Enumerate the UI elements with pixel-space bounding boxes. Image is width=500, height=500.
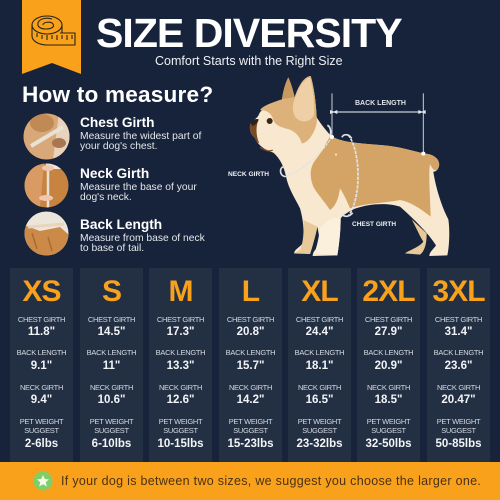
size column: XS: 9.1" — [31, 360, 52, 372]
photo: back length — [24, 212, 68, 256]
measurement: neck girth loop — [281, 125, 332, 177]
size column: 2XL: 27.9" — [375, 326, 402, 338]
size column: M: 12.6" — [167, 394, 194, 406]
size column: L: CHEST GIRTH — [227, 315, 274, 324]
size column: XL: 23-32lbs — [296, 438, 343, 450]
dog illustration — [250, 76, 449, 256]
size column: M: NECK GIRTH — [159, 383, 202, 392]
size column: 3XL: 50-85lbs — [435, 438, 482, 450]
size column: XS: CHEST GIRTH — [18, 315, 65, 324]
size column: L: 15-23lbs — [227, 438, 274, 450]
size column: XS: 2-6lbs — [25, 438, 58, 450]
size column: S: BACK LENGTH — [87, 348, 136, 357]
size column: 3XL: 3XL — [432, 275, 485, 308]
text: neck girth: dog's neck. — [80, 192, 132, 203]
size column: L: NECK GIRTH — [229, 383, 272, 392]
size column: XS: NECK GIRTH — [20, 383, 63, 392]
size column: M: M — [168, 275, 193, 308]
icon: green star badge — [34, 472, 52, 490]
size column: 2XL: PET WEIGHT — [367, 417, 410, 426]
size column: XS: 11.8" — [28, 326, 55, 338]
size column: 2XL: CHEST GIRTH — [365, 315, 412, 324]
size column: XS: XS — [22, 275, 61, 308]
size column: 3XL: NECK GIRTH — [437, 383, 480, 392]
size column: XL: XL — [301, 275, 338, 308]
dog diagram — [250, 76, 450, 256]
size column: XS: 9.4" — [31, 394, 52, 406]
label: neck girth: NECK GIRTH — [228, 171, 269, 178]
size column: M: 13.3" — [167, 360, 194, 372]
size column: 3XL: BACK LENGTH — [434, 348, 483, 357]
size column: S — [80, 268, 143, 462]
size column: 2XL: SUGGEST — [371, 426, 406, 435]
size column: 2XL: BACK LENGTH — [364, 348, 413, 357]
measurement: chest girth loop — [342, 135, 358, 216]
size column: M: CHEST GIRTH — [157, 315, 204, 324]
text: chest girth — [80, 115, 202, 152]
size column: XS — [10, 268, 73, 462]
size column: S: NECK GIRTH — [90, 383, 133, 392]
size column: 2XL: NECK GIRTH — [367, 383, 410, 392]
size column: 3XL: SUGGEST — [441, 426, 476, 435]
footer note: If your dog is between two sizes, we suggest you choose the larger one. — [61, 474, 481, 488]
size column: S: 10.6" — [98, 394, 125, 406]
size column: XL: SUGGEST — [302, 426, 337, 435]
photo: chest girth — [24, 114, 70, 160]
label: chest girth: CHEST GIRTH — [352, 221, 396, 228]
size column: XL: 16.5" — [306, 394, 333, 406]
size column: L — [219, 268, 282, 462]
size column: S: CHEST GIRTH — [88, 315, 135, 324]
text: chest girth: your dog's chest. — [80, 141, 158, 152]
measurement: back length arrow — [330, 93, 426, 156]
ribbon badge with tape measure icon — [22, 0, 81, 74]
size column: 3XL: CHEST GIRTH — [435, 315, 482, 324]
size column: S: S — [102, 275, 121, 308]
size column: 3XL: 23.6" — [445, 360, 472, 372]
text: chest girth: Chest Girth — [80, 115, 155, 130]
text: neck girth: Measure the base of your — [80, 182, 197, 193]
text: back length — [80, 217, 205, 254]
size column: L: 15.7" — [237, 360, 264, 372]
size column: 2XL: 18.5" — [375, 394, 402, 406]
size column: S: 6-10lbs — [92, 438, 131, 450]
size column: 3XL — [427, 268, 490, 462]
size column: M: 10-15lbs — [157, 438, 204, 450]
size column: S: SUGGEST — [94, 426, 129, 435]
text: chest girth: Measure the widest part of — [80, 131, 201, 142]
size column: 3XL: 31.4" — [445, 326, 472, 338]
size column: M: 17.3" — [167, 326, 194, 338]
size column: XS: BACK LENGTH — [17, 348, 66, 357]
size column: M: PET WEIGHT — [159, 417, 202, 426]
size column: XL: 24.4" — [306, 326, 333, 338]
size column: 3XL: 20.47" — [441, 394, 476, 406]
size column: S: 11" — [103, 360, 120, 372]
title: SIZE DIVERSITY — [96, 10, 402, 56]
footer banner — [0, 462, 500, 500]
size column: XL: PET WEIGHT — [298, 417, 341, 426]
size column: XS: SUGGEST — [24, 426, 59, 435]
size column: XL: 18.1" — [306, 360, 333, 372]
label: back length: BACK LENGTH — [355, 100, 406, 107]
text: neck girth — [80, 166, 197, 203]
size column: L: PET WEIGHT — [229, 417, 272, 426]
size column: L: L — [242, 275, 259, 308]
size column: XL: BACK LENGTH — [295, 348, 344, 357]
size column: L: 14.2" — [237, 394, 264, 406]
heading: how to measure: How to measure? — [22, 82, 213, 107]
size column: XL: CHEST GIRTH — [296, 315, 343, 324]
size column: 2XL: 20.9" — [375, 360, 402, 372]
text: back length: Measure from base of neck — [80, 233, 205, 244]
size column: S: 14.5" — [98, 326, 125, 338]
subtitle: Comfort Starts with the Right Size — [155, 54, 343, 68]
size column: 2XL: 32-50lbs — [365, 438, 412, 450]
size column: L: 20.8" — [237, 326, 264, 338]
size column: L: SUGGEST — [233, 426, 268, 435]
size column: L: BACK LENGTH — [226, 348, 275, 357]
size column: M — [149, 268, 212, 462]
size column: 2XL — [357, 268, 420, 462]
photo: neck girth — [24, 164, 68, 208]
text: neck girth: Neck Girth — [80, 166, 149, 181]
size column: XL — [288, 268, 351, 462]
size column: 2XL: 2XL — [362, 275, 415, 308]
size column: XL: NECK GIRTH — [298, 383, 341, 392]
size column: M: BACK LENGTH — [156, 348, 205, 357]
size column: 3XL: PET WEIGHT — [437, 417, 480, 426]
size column: XS: PET WEIGHT — [20, 417, 63, 426]
text: back length: Back Length — [80, 217, 162, 232]
size column: S: PET WEIGHT — [90, 417, 133, 426]
text: back length: to base of tail. — [80, 243, 144, 254]
size column: M: SUGGEST — [163, 426, 198, 435]
